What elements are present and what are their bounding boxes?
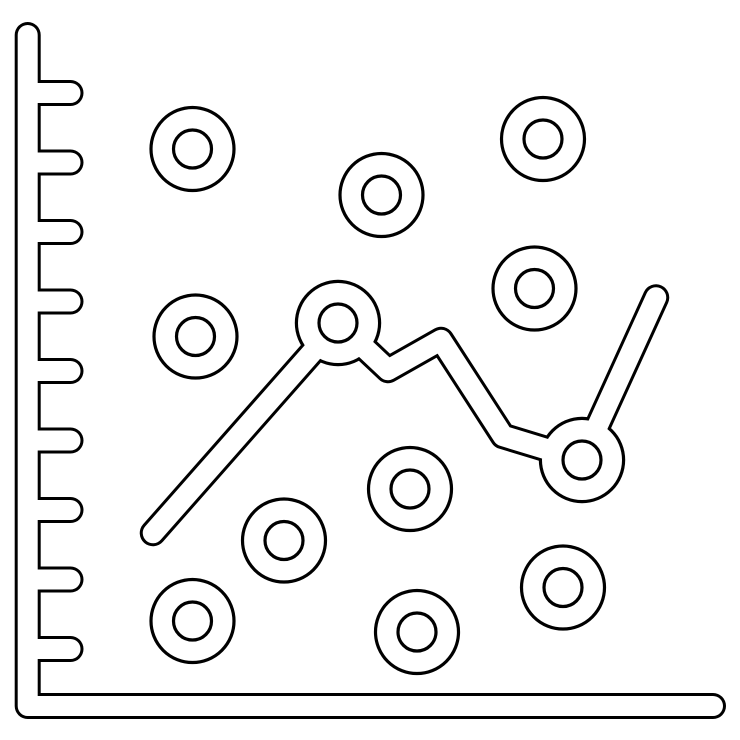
data point 1 <box>151 108 234 190</box>
data point 7 <box>242 499 326 582</box>
data point 10 <box>522 546 604 629</box>
data point 9 <box>376 590 458 674</box>
data point 5 <box>154 295 237 378</box>
data point 2 <box>340 154 423 236</box>
trend line with two highlighted points <box>153 280 656 533</box>
data point 3 <box>502 98 584 180</box>
scattered data points <box>151 98 604 674</box>
data point 8 <box>151 580 234 662</box>
data point 4 <box>493 247 576 330</box>
data point 6 <box>368 448 452 530</box>
